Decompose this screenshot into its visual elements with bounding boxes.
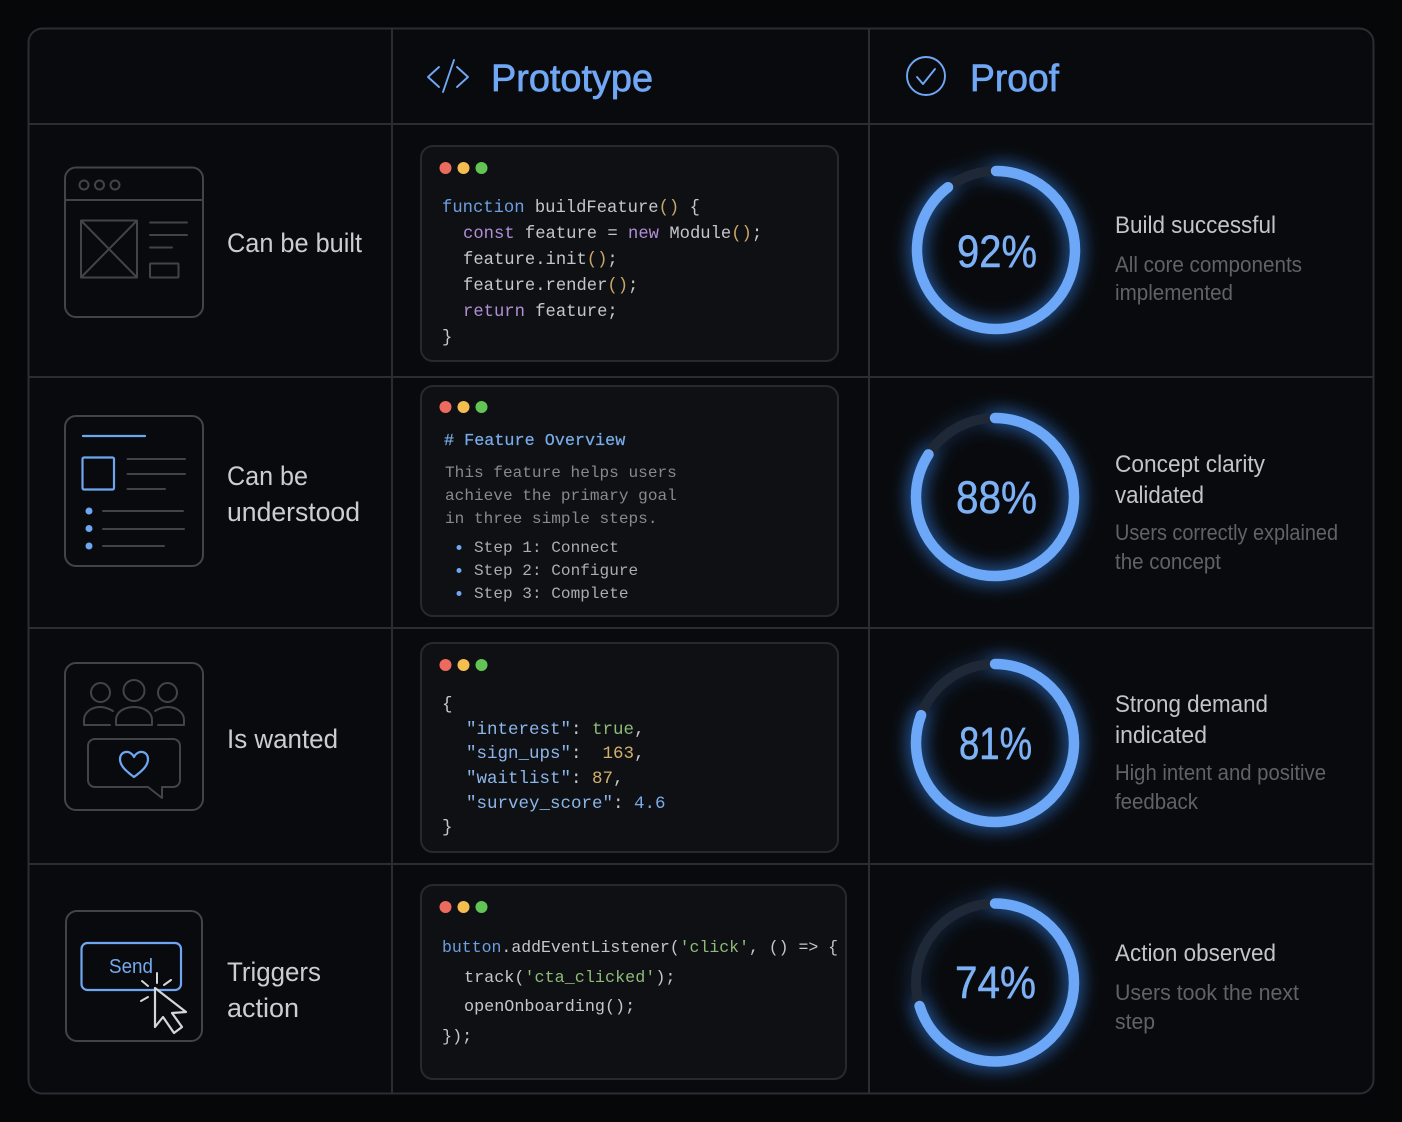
proof text: Build successful: implemented <box>1115 280 1233 305</box>
icon: send button and cursor <box>66 911 202 1041</box>
proof text: Strong demand indicated: Strong demand <box>1115 691 1268 718</box>
column heading: Proof <box>907 57 1059 100</box>
proof text: Concept clarity validated: Concept clarity <box>1115 451 1265 478</box>
JSON text: { <box>442 695 453 715</box>
column heading: Prototype: Prototype <box>491 58 653 100</box>
listener text: openOnboarding(); <box>464 998 635 1017</box>
JSON text: "survey_score": 4.6 <box>466 794 666 814</box>
code panel: feature overview markdown <box>421 386 838 616</box>
row label: Triggers action: action <box>227 993 299 1023</box>
row label: Can be built <box>65 168 362 317</box>
proof text: Concept clarity validated <box>1115 451 1338 574</box>
row label: Triggers action <box>66 911 321 1041</box>
proof: 88 percent ring: 88% <box>956 472 1037 523</box>
proof text: Strong demand indicated <box>1115 691 1326 814</box>
window dots <box>440 162 488 174</box>
code text: function buildFeature() { <box>442 199 700 218</box>
code text: feature.init(); <box>463 251 618 270</box>
listener text <box>442 938 838 1047</box>
listener text: track('cta_clicked'); <box>464 969 676 988</box>
JSON text <box>442 695 666 838</box>
proof text: Action observed: Action observed <box>1115 940 1276 967</box>
row label: Can be built: Can be built <box>227 228 362 258</box>
code text: const feature = new Module(); <box>463 225 762 244</box>
markdown text: in three simple steps. <box>445 510 657 528</box>
proof: 92 percent ring <box>917 171 1075 329</box>
proof text: Concept clarity validated: the concept <box>1115 549 1221 574</box>
markdown text: Step 2: Configure <box>474 562 638 580</box>
code text <box>442 199 762 348</box>
icon: document outline <box>65 416 203 566</box>
code panel: build feature function <box>421 146 838 361</box>
proof: 81 percent ring <box>916 664 1074 822</box>
markdown text: achieve the primary goal <box>445 487 677 505</box>
code panel: JSON metrics <box>421 643 838 852</box>
JSON text: } <box>442 818 453 838</box>
row label: Is wanted <box>65 663 338 810</box>
proof: 92 percent ring: 92% <box>957 226 1037 277</box>
proof: 74 percent ring <box>916 904 1074 1062</box>
proof text: Build successful: Build successful <box>1115 212 1276 239</box>
markdown text: Step 1: Connect <box>474 539 619 557</box>
markdown text <box>444 432 677 603</box>
window dots <box>440 901 488 913</box>
proof text: Action observed: Users took the next <box>1115 980 1299 1005</box>
markdown text: # Feature Overview <box>444 432 625 451</box>
proof: 81 percent ring: 81% <box>959 718 1032 769</box>
code text: } <box>442 329 452 348</box>
proof text: Concept clarity validated: validated <box>1115 482 1204 509</box>
JSON text: "sign_ups": 163, <box>466 744 645 764</box>
proof: 88 percent ring <box>916 418 1074 576</box>
column heading: Proof: Proof <box>970 58 1059 100</box>
icon: browser wireframe <box>65 168 203 317</box>
row label: Can be understood: Can be <box>227 461 308 491</box>
code text: feature.render(); <box>463 277 638 296</box>
proof: 74 percent ring: 74% <box>955 957 1036 1008</box>
proof text: Strong demand indicated: High intent and positive <box>1115 760 1326 785</box>
icon: code brackets <box>428 60 468 92</box>
row label: Triggers action: Triggers <box>227 957 321 987</box>
JSON text: "waitlist": 87, <box>466 769 624 789</box>
proof text: Concept clarity validated: Users correctly explained <box>1115 520 1338 545</box>
window dots <box>440 401 488 413</box>
window dots <box>440 659 488 671</box>
proof text: Strong demand indicated: feedback <box>1115 789 1199 814</box>
listener text: button.addEventListener('click', () => { <box>442 938 838 957</box>
icon: send button and cursor: Send <box>109 956 153 978</box>
icon: check circle <box>907 57 945 95</box>
markdown text: This feature helps users <box>445 464 677 482</box>
row label: Can be understood: understood <box>227 497 360 527</box>
row label: Is wanted: Is wanted <box>227 724 338 754</box>
proof text: Strong demand indicated: indicated <box>1115 722 1207 749</box>
listener text: }); <box>442 1028 472 1047</box>
markdown text: Step 3: Complete <box>474 585 629 603</box>
proof text: Build successful: All core components <box>1115 252 1302 277</box>
proof text: Action observed: step <box>1115 1009 1155 1034</box>
icon: people and heart bubble <box>65 663 203 810</box>
code text: return feature; <box>463 303 618 322</box>
JSON text: "interest": true, <box>466 720 645 740</box>
code panel: click listener <box>421 885 846 1079</box>
row label: Can be understood <box>65 416 360 566</box>
proof text: Action observed <box>1115 940 1299 1034</box>
proof text: Build successful <box>1115 212 1302 305</box>
